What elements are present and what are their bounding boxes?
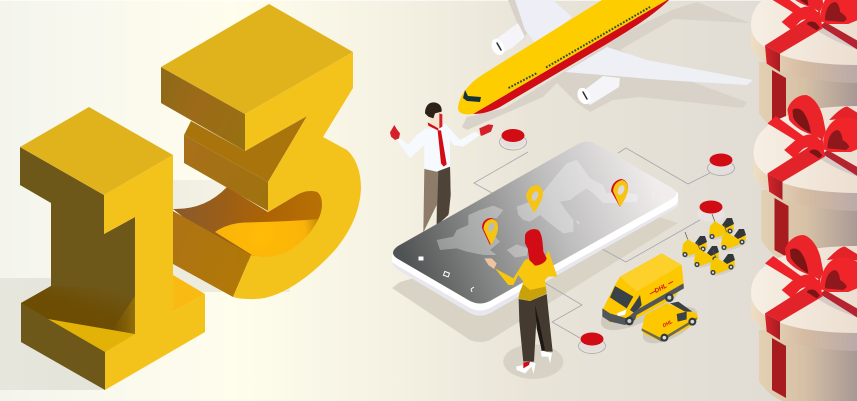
button near scooters — [698, 200, 724, 222]
fuselage yellow — [458, 0, 667, 114]
passenger windows — [508, 7, 650, 88]
cockpit window — [463, 90, 481, 102]
wall shadows behind numerals — [0, 180, 290, 390]
woman — [484, 229, 563, 379]
connector lines — [474, 148, 710, 338]
scooter 3 — [721, 225, 748, 253]
button bottom — [578, 332, 606, 354]
1 base top — [48, 319, 135, 352]
phone screen — [393, 142, 676, 304]
man's left hand — [390, 125, 400, 140]
map pin centre — [526, 185, 543, 213]
gift boxes — [751, 0, 857, 401]
gift box bottom — [751, 235, 857, 401]
3 lower side — [173, 211, 251, 297]
scooter 4 — [694, 242, 721, 270]
3 mid side — [184, 135, 268, 211]
scooter 5 — [710, 250, 737, 278]
woman's trousers — [519, 294, 553, 362]
fuselage red belly — [473, 0, 669, 114]
3 top face — [161, 4, 353, 114]
3 mid recess — [184, 116, 307, 182]
3 top side — [161, 67, 245, 151]
DHL logo small van: DHL — [662, 319, 674, 329]
button top left — [500, 129, 526, 150]
woman's hand — [484, 258, 497, 269]
smartphone with map — [392, 142, 678, 316]
1 orange base step — [173, 275, 205, 312]
1 dark side — [20, 147, 135, 352]
upper wing — [515, 0, 572, 45]
button top right — [708, 154, 734, 176]
numeral 3 — [161, 4, 361, 299]
1 lower shade — [21, 286, 135, 334]
man's hair — [425, 102, 442, 118]
plane shadow — [462, 0, 750, 130]
3 front face — [233, 52, 361, 299]
phone nav icons — [419, 257, 474, 292]
airplane — [458, 0, 753, 114]
scooter 2 — [709, 214, 736, 242]
red buttons — [500, 129, 734, 354]
gift box top — [751, 0, 857, 152]
woman's jacket — [495, 250, 557, 301]
man's face — [430, 112, 442, 128]
phone shadow — [392, 213, 678, 342]
man's collar — [428, 122, 438, 131]
large DHL van — [594, 253, 686, 340]
scooters — [682, 214, 748, 278]
1 base side — [21, 303, 105, 390]
lower wing — [565, 47, 753, 85]
man's tie — [438, 130, 447, 167]
numeral 1 — [20, 107, 205, 390]
man — [390, 102, 493, 172]
man's shirt — [397, 123, 480, 172]
scooter 1 — [682, 232, 709, 260]
1 top face — [20, 107, 173, 195]
upper engine — [489, 23, 525, 57]
lower engine — [575, 76, 620, 106]
world map — [437, 160, 654, 258]
map pin left — [482, 218, 498, 245]
1 front face — [104, 155, 205, 390]
3 inner cavity — [173, 187, 322, 262]
phone body — [392, 142, 678, 316]
woman's shoes — [516, 362, 536, 374]
gift box middle — [754, 95, 857, 280]
man's trousers — [423, 167, 451, 232]
woman's floor shadow — [503, 344, 563, 379]
map pin right — [611, 179, 628, 207]
man's right hand — [479, 124, 493, 136]
DHL logo large van: DHL — [654, 282, 668, 295]
3 lit floor — [215, 219, 320, 258]
small DHL van — [637, 299, 703, 351]
woman's hijab — [525, 229, 547, 266]
